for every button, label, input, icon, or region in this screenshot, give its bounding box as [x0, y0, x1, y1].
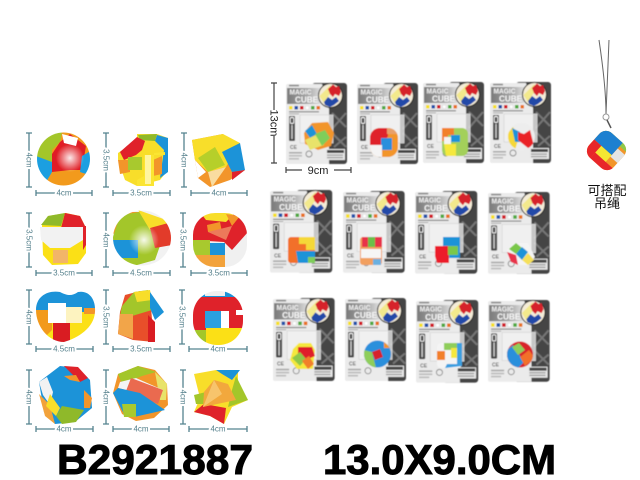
card body: CUBE [279, 203, 303, 212]
packaged card row 2, column 4 [488, 192, 550, 274]
card body: MAGIC [277, 304, 299, 312]
card body: MAGIC [347, 198, 369, 205]
card body: CUBE [497, 205, 521, 214]
horizontal dimension: 4cm [56, 188, 72, 198]
vertical dimension: 4cm [24, 309, 34, 325]
card body: CUBE [352, 204, 376, 213]
horizontal dimension: 4cm [211, 188, 227, 198]
card body: CUBE [499, 94, 523, 104]
packaged puzzle [435, 237, 460, 263]
packaged card row 2, column 2 [343, 191, 405, 273]
icon: polyhedron puzzle [192, 134, 245, 187]
horizontal dimension: 4cm [210, 344, 226, 354]
horizontal dimension: 4cm [210, 424, 226, 434]
horizontal dimension: 4cm [56, 424, 72, 434]
card body: CUBE [424, 204, 448, 213]
cell: rounded block puzzle 4cm [102, 366, 169, 434]
card body: CUBE [497, 313, 521, 322]
packaged puzzle [507, 243, 535, 265]
horizontal dimension: 3.5cm [208, 268, 230, 278]
retail card dimension: width [286, 165, 351, 177]
keychain caption [587, 183, 627, 211]
icon: square ball puzzle [192, 212, 248, 268]
card body: CE [361, 145, 369, 151]
horizontal dimension: 4cm [133, 424, 149, 434]
horizontal dimension: 3.5cm [130, 188, 152, 198]
card body [286, 83, 347, 164]
horizontal dimension: 4.5cm [53, 344, 75, 354]
packaged card row 3, column 2 [345, 298, 406, 381]
icon: octagon puzzle [40, 213, 86, 265]
vertical dimension: 4cm [24, 389, 34, 405]
card body [423, 82, 484, 163]
card body: CE [349, 362, 357, 368]
packaged puzzle [370, 128, 398, 157]
card body: MAGIC [426, 88, 448, 96]
vertical dimension: 3.5cm [178, 229, 188, 251]
vertical dimension: 3.5cm [102, 149, 110, 171]
icon: round puzzle [112, 210, 172, 267]
card body: CUBE [282, 311, 306, 320]
cell: block puzzle 3.5cm [102, 133, 170, 198]
cell: octagon puzzle 3.5cm [24, 213, 92, 278]
packaged puzzle [288, 237, 315, 263]
packaged card row 1, column 3 [423, 82, 484, 163]
card body [343, 191, 405, 273]
card body: CE [419, 254, 427, 260]
retail card dimension: height: 13cm [268, 110, 280, 136]
icon: geometric puzzle [39, 366, 92, 424]
icon: star puzzle [194, 370, 248, 424]
card body: CE [274, 253, 282, 259]
packaged card row 3, column 1 [273, 298, 335, 381]
cell: geometric puzzle 4cm [24, 366, 93, 434]
card body: MAGIC [494, 88, 516, 96]
card body: CUBE [366, 96, 390, 104]
card body: MAGIC [290, 90, 312, 96]
horizontal dimension: 3.5cm [130, 344, 152, 354]
packaged card row 1, column 2 [357, 83, 418, 164]
vertical dimension: 4cm [180, 152, 188, 168]
packaged card row 1, column 1 [286, 83, 347, 164]
icon: trapezoid puzzle [118, 290, 164, 342]
vertical dimension: 4cm [102, 232, 110, 248]
vertical dimension: 3.5cm [24, 229, 34, 251]
packaged puzzle [437, 343, 462, 368]
vertical dimension: 4cm [102, 389, 110, 405]
card body: CUBE [295, 96, 319, 104]
packaged card row 1, column 4 [490, 82, 551, 163]
cell: heart puzzle 4.5cm [24, 288, 96, 354]
icon: rounded block puzzle [113, 366, 168, 421]
packaged card row 3, column 4 [488, 300, 550, 382]
cell: square ball puzzle 3.5cm [178, 212, 248, 278]
card body [490, 82, 551, 163]
horizontal dimension: 4.5cm [130, 268, 152, 278]
card body [415, 191, 477, 274]
card body [488, 192, 550, 274]
card body [270, 190, 332, 273]
retail card dimension: height [268, 83, 280, 163]
packaged puzzle [506, 340, 534, 368]
retail card dimension: width: 9cm [308, 165, 328, 177]
cell: barrel puzzle 4cm [178, 290, 247, 354]
keychain caption: 吊绳 [594, 196, 620, 211]
icon: round puzzle [36, 132, 92, 186]
card body: CE [492, 363, 500, 369]
icon: block puzzle [118, 134, 168, 186]
packaged puzzle [442, 128, 468, 156]
card body: MAGIC [492, 199, 514, 206]
card body [345, 298, 406, 381]
card body: MAGIC [274, 196, 296, 204]
card body: MAGIC [360, 90, 382, 96]
packaged puzzle [508, 126, 536, 149]
card body: CE [290, 145, 298, 151]
vertical dimension: 4cm [178, 389, 188, 405]
icon: heart puzzle [36, 292, 96, 342]
card body: MAGIC [419, 197, 441, 205]
cell: round puzzle 4.5cm [102, 210, 172, 278]
cell: round puzzle 4cm [24, 132, 92, 198]
card body: CE [494, 144, 502, 150]
card body: CUBE [354, 311, 378, 320]
horizontal dimension: 3.5cm [53, 268, 75, 278]
packaged card row 2, column 3 [415, 191, 477, 274]
card body [357, 83, 418, 164]
card body: CUBE [425, 313, 449, 322]
packaged puzzle [360, 237, 382, 265]
card body: MAGIC [492, 307, 514, 314]
vertical dimension: 3.5cm [178, 306, 186, 328]
packaged card row 2, column 1 [270, 190, 332, 273]
vertical dimension: 4cm [24, 152, 34, 168]
icon: keychain cube [586, 130, 626, 170]
cell: polyhedron puzzle 4cm [180, 133, 247, 198]
card body [488, 300, 550, 382]
keychain caption: 可搭配 [587, 183, 627, 198]
packaged card row 3, column 3 [416, 300, 478, 383]
card body: MAGIC [348, 304, 370, 312]
card body: CE [277, 362, 285, 368]
card body: CE [347, 254, 355, 260]
product size grid [24, 132, 248, 434]
card body [273, 298, 335, 381]
card body: CE [427, 144, 435, 150]
cell: star puzzle 4cm [178, 370, 248, 434]
packaged puzzle [364, 340, 392, 368]
cell: trapezoid puzzle 3.5cm [102, 290, 170, 354]
packaged puzzle [290, 343, 315, 369]
card body: CE [492, 255, 500, 261]
vertical dimension: 3.5cm [102, 306, 110, 328]
card body [416, 300, 478, 383]
keychain strap [599, 40, 611, 128]
icon: barrel puzzle [192, 290, 244, 346]
card body: CE [420, 363, 428, 369]
packaged puzzle [304, 122, 334, 150]
card body: CUBE [432, 94, 456, 104]
card body: MAGIC [420, 306, 442, 314]
